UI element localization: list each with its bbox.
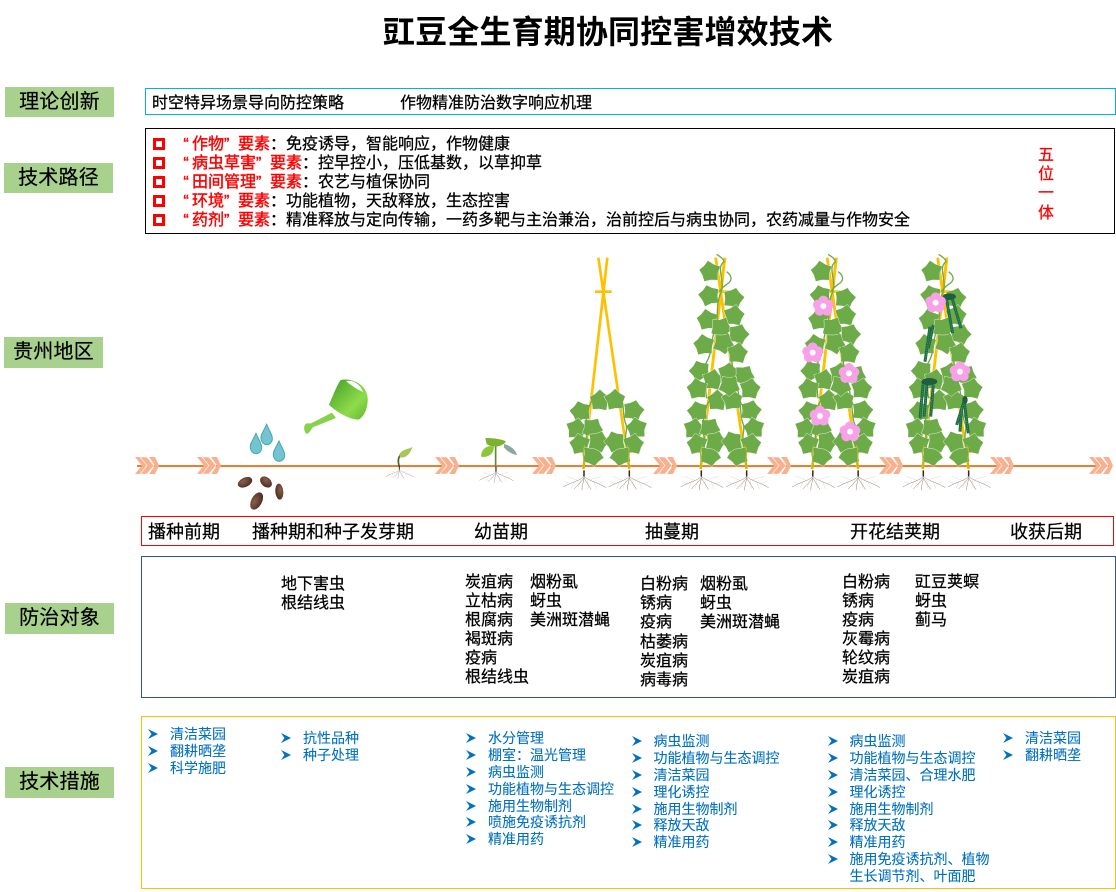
- list: seedling measures: 水分管理: [488, 730, 544, 746]
- list: five elements: [153, 135, 910, 229]
- item: field management: 田间管理 要素：农艺与植保协同: [192, 174, 430, 191]
- label: 防治对象: 防治对象: [19, 607, 100, 629]
- list: seedling measures: 施用生物制剂: [488, 798, 572, 814]
- item: environment: 环境 要素：功能植物，天敌释放，生态控害: [192, 193, 510, 210]
- list: sowing measures: [281, 730, 359, 763]
- label: 理论创新: [5, 87, 114, 117]
- list: vining measures: 病虫监测: [654, 733, 710, 749]
- list: flowering measures: 病虫监测: [850, 733, 906, 749]
- list: seedling pests: 美洲斑潜蝇: [530, 612, 610, 629]
- list: flowering pests: 豇豆荚螟: [915, 574, 979, 591]
- list: post-harvest measures: [1003, 730, 1081, 763]
- item: pesticide: 药剂 要素：精准释放与定向传输，一药多靶与主治兼治，治前控后与病虫协同，农药减量与作物安全: [192, 212, 910, 229]
- panel: growth stages: [141, 516, 1114, 546]
- panel: technical route: [145, 128, 1115, 234]
- item: pests: ”: [256, 155, 261, 172]
- item: field management: ”: [256, 174, 261, 191]
- stage: before sowing: 播种前期: [148, 522, 220, 542]
- list: pre-sowing measures: 科学施肥: [170, 760, 226, 776]
- list: seedling diseases: 根腐病: [465, 612, 513, 629]
- list: flowering measures: 施用免疫诱抗剂、植物: [850, 851, 990, 867]
- item: pests: “: [183, 155, 189, 172]
- list: sowing measures: 抗性品种: [303, 730, 359, 746]
- stage: flowering and podding: 开花结荚期: [850, 522, 940, 542]
- plant: vining stage young: [563, 258, 651, 490]
- list: vining diseases: 病毒病: [640, 672, 688, 689]
- list: flowering diseases: 疫病: [842, 612, 874, 629]
- icon: sprout: [386, 447, 414, 479]
- list: sowing targets: [281, 575, 345, 612]
- list: vining measures: 释放天敌: [654, 817, 710, 833]
- item: crop: 作物 要素：免疫诱导，智能响应，作物健康: [192, 136, 510, 153]
- list: vining pests: [700, 575, 780, 631]
- list: vining diseases: 炭疽病: [640, 653, 688, 670]
- list: flowering diseases: 轮纹病: [842, 650, 890, 667]
- list: vining diseases: 锈病: [640, 595, 672, 612]
- list: seedling measures: 功能植物与生态调控: [488, 781, 614, 797]
- panel: technical measures: [141, 716, 1116, 889]
- list: flowering measures: 施用生物制剂: [850, 801, 934, 817]
- list: flowering pests: 蚜虫: [915, 593, 947, 610]
- plant: podding stage: [903, 254, 991, 490]
- list: sowing measures: 种子处理: [303, 747, 359, 763]
- text: five in one: 五位一体: [1038, 147, 1054, 222]
- stage: sowing and germination: 播种期和种子发芽期: [252, 522, 414, 542]
- label: 技术路径: [4, 163, 113, 193]
- icon: watering can: [304, 379, 368, 434]
- list: flowering pests: [915, 573, 979, 629]
- list: seedling diseases: 根结线虫: [465, 669, 529, 686]
- list: flowering measures: 释放天敌: [850, 817, 906, 833]
- list: flowering measures: 功能植物与生态调控: [850, 750, 976, 766]
- text: mechanism: 作物精准防治数字响应机理: [400, 95, 592, 112]
- list: post-harvest measures: 清洁菜园: [1025, 730, 1081, 746]
- plant: climbing stage: [681, 254, 769, 490]
- item: pesticide: ”: [224, 212, 229, 229]
- list: post-harvest measures: 翻耕晒垄: [1025, 747, 1081, 763]
- list: vining diseases: 枯萎病: [640, 634, 688, 651]
- list: seedling pests: 烟粉虱: [530, 574, 578, 591]
- list: vining measures: 施用生物制剂: [654, 801, 738, 817]
- list: seedling measures: 棚室：温光管理: [488, 747, 586, 763]
- label: 防治对象: [5, 603, 114, 634]
- panel: theory innovation: [145, 88, 1116, 115]
- list: pre-sowing measures: [148, 726, 226, 776]
- panel: control targets: [141, 556, 1116, 698]
- label: 技术措施: 技术措施: [19, 771, 100, 793]
- list: vining measures: 功能植物与生态调控: [654, 750, 780, 766]
- list: vining diseases: 白粉病: [640, 576, 688, 593]
- item: environment: ”: [224, 193, 229, 210]
- plant: flowering stage: [792, 254, 880, 490]
- list: seedling measures: 喷施免疫诱抗剂: [488, 814, 586, 830]
- list: seedling measures: [466, 730, 614, 847]
- list: flowering diseases: 白粉病: [842, 574, 890, 591]
- item: crop: ”: [224, 136, 229, 153]
- flowers on flowering plant: [802, 296, 860, 441]
- list: flowering measures: 理化诱控: [850, 784, 906, 800]
- list: pre-sowing measures: 清洁菜园: [170, 726, 226, 742]
- icon: seeds: [236, 474, 284, 512]
- list: seedling pests: 蚜虫: [530, 593, 562, 610]
- list: vining measures: [632, 733, 780, 850]
- icon: seedling: [479, 438, 517, 483]
- list: seedling diseases: 褐斑病: [465, 631, 513, 648]
- list: vining pests: 烟粉虱: [700, 576, 748, 593]
- list: vining pests: 美洲斑潜蝇: [700, 614, 780, 631]
- list: sowing targets: 根结线虫: [281, 595, 345, 612]
- icon: water drops: [250, 424, 285, 461]
- label: 贵州地区: 贵州地区: [13, 341, 94, 363]
- item: pesticide: “: [183, 212, 189, 229]
- list: flowering measures: 精准用药: [850, 834, 906, 850]
- list: flowering diseases: 灰霉病: [842, 631, 890, 648]
- list: vining measures: 理化诱控: [654, 784, 710, 800]
- label: 理论创新: 理论创新: [19, 91, 100, 113]
- timeline chevrons: [135, 457, 1113, 474]
- list: flowering pests: 蓟马: [915, 612, 947, 629]
- stage: seedling: 幼苗期: [474, 522, 528, 542]
- label: 技术措施: [5, 767, 114, 798]
- list: vining measures: 清洁菜园: [654, 767, 710, 783]
- list: vining pests: 蚜虫: [700, 595, 732, 612]
- title: 豇豆全生育期协同控害增效技术: [383, 14, 833, 50]
- label: 贵州地区: [4, 337, 103, 368]
- list: flowering diseases: 锈病: [842, 593, 874, 610]
- item: pests: 病虫草害 要素：控早控小，压低基数，以草抑草: [192, 155, 542, 172]
- list: seedling diseases: 立枯病: [465, 593, 513, 610]
- flowers and pods on podding plant: [920, 292, 970, 433]
- label: 技术路径: 技术路径: [18, 167, 99, 189]
- list: flowering diseases: 炭疽病: [842, 669, 890, 686]
- list: flowering measures: 清洁菜园、合理水肥: [850, 767, 976, 783]
- item: environment: “: [183, 193, 189, 210]
- list: seedling diseases: 疫病: [465, 650, 497, 667]
- list: flowering measures: 生长调节剂、叶面肥: [850, 868, 976, 884]
- list: seedling diseases: 炭疽病: [465, 574, 513, 591]
- list: seedling pests: [530, 573, 610, 629]
- item: crop: “: [183, 136, 189, 153]
- list: vining diseases: [640, 575, 688, 689]
- timeline axis: [137, 465, 1110, 467]
- list: flowering diseases: [842, 573, 890, 686]
- list: flowering measures: [828, 733, 990, 884]
- list: seedling measures: 病虫监测: [488, 764, 544, 780]
- list: pre-sowing measures: 翻耕晒垄: [170, 743, 226, 759]
- stage: post harvest: 收获后期: [1010, 522, 1082, 542]
- list: vining diseases: 疫病: [640, 614, 672, 631]
- stage: vining: 抽蔓期: [645, 522, 699, 542]
- item: field management: “: [183, 174, 189, 191]
- list: sowing targets: 地下害虫: [281, 576, 345, 593]
- list: seedling diseases: [465, 573, 529, 686]
- list: seedling measures: 精准用药: [488, 831, 544, 847]
- text: strategy: 时空特异场景导向防控策略: [152, 95, 344, 112]
- list: vining measures: 精准用药: [654, 834, 710, 850]
